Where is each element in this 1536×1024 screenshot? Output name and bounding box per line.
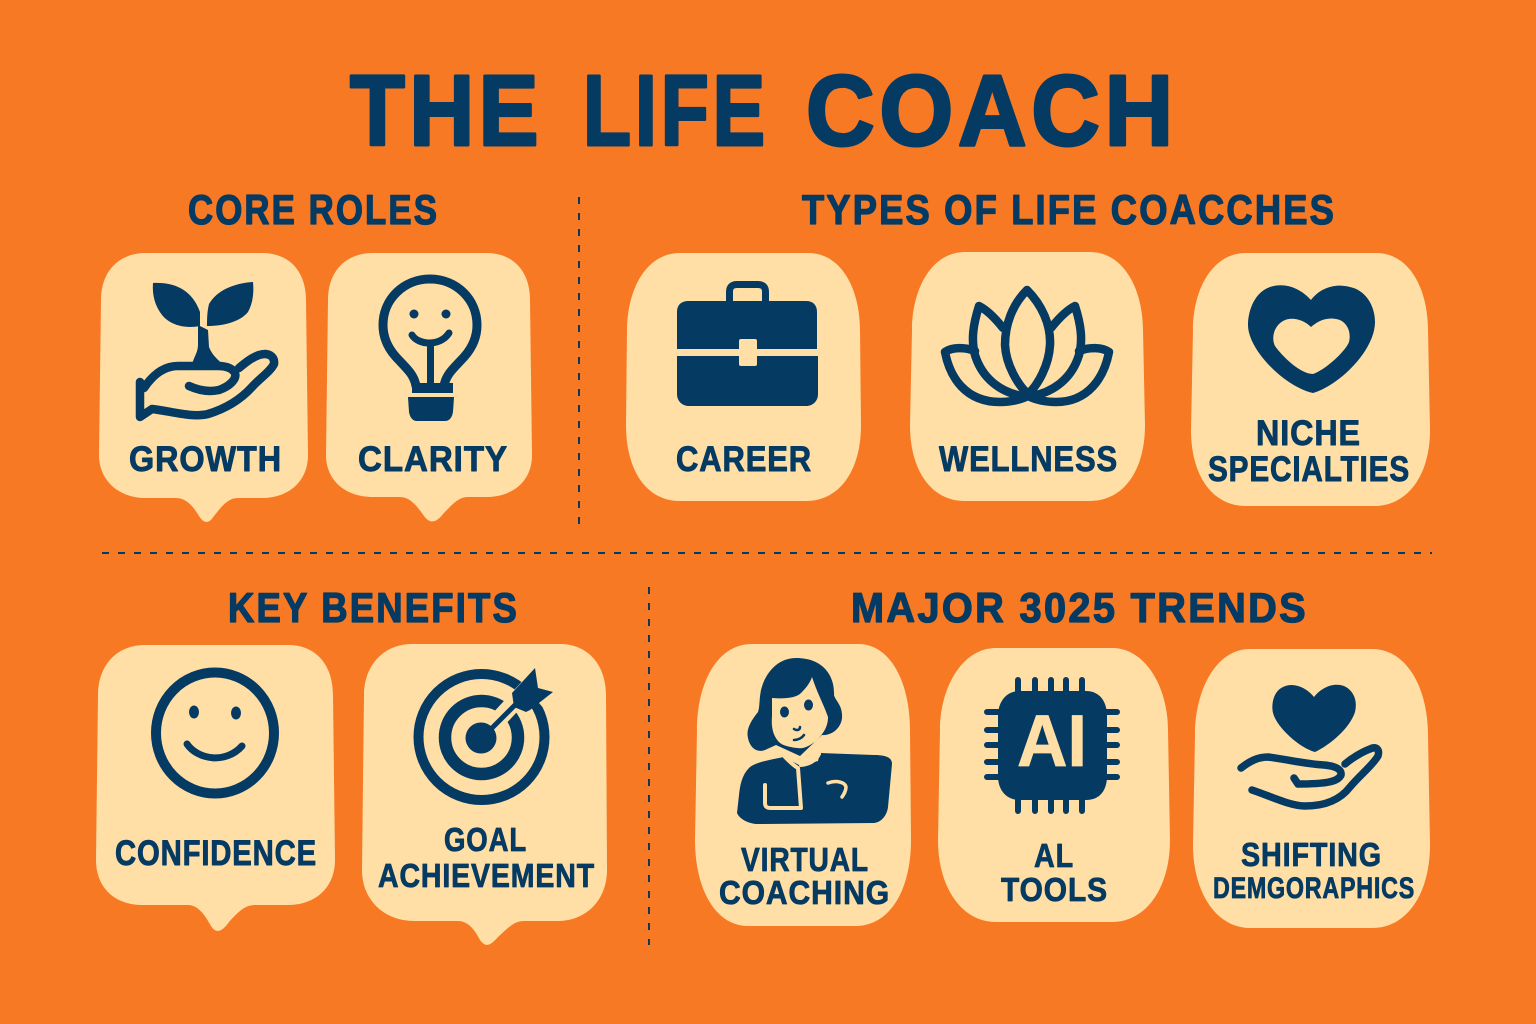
title: LIFE <box>583 55 769 167</box>
heading: types of life coaches: TYPES OF LIFE COACCHES <box>802 186 1336 233</box>
icon: smiling light bulb <box>383 279 477 421</box>
panel: major trends <box>695 584 1430 928</box>
card: confidence <box>96 645 335 931</box>
card: goal achievement <box>362 644 607 945</box>
card: growth <box>99 253 308 522</box>
label: wellness: WELLNESS <box>939 440 1118 479</box>
label: achievement: ACHIEVEMENT <box>378 857 595 894</box>
label: demographics: DEMGORAPHICS <box>1213 872 1415 905</box>
card: virtual coaching <box>695 644 911 926</box>
icon: target with arrow <box>418 668 553 800</box>
icon: ai chip <box>987 680 1117 811</box>
heading: key benefits: KEY BENEFITS <box>228 584 519 631</box>
panel: core roles <box>99 186 532 522</box>
card: wellness <box>910 252 1145 501</box>
title: THE <box>350 55 543 167</box>
label: niche: NICHE <box>1256 414 1361 453</box>
label: shifting: SHIFTING <box>1241 836 1382 873</box>
icon: briefcase <box>677 284 818 406</box>
panel: key benefits <box>96 584 607 945</box>
icon: coach at laptop <box>737 658 892 824</box>
card: clarity <box>326 253 532 521</box>
panel: types of life coaches <box>626 186 1430 506</box>
label: career: CAREER <box>676 440 812 479</box>
heading: major trends: MAJOR 3025 TRENDS <box>851 584 1308 631</box>
label: virtual: VIRTUAL <box>741 841 869 878</box>
card: career <box>626 253 861 501</box>
label: tools: TOOLS <box>1001 871 1108 908</box>
label: specialties: SPECIALTIES <box>1208 450 1410 489</box>
label: al: AL <box>1034 837 1074 874</box>
icon: heart over open hand <box>1241 685 1379 806</box>
icon: lotus <box>945 290 1109 402</box>
card: ai tools <box>938 648 1170 922</box>
icon: double heart <box>1248 285 1375 393</box>
label: coaching: COACHING <box>719 874 890 911</box>
chip letters: AI <box>1017 701 1087 782</box>
title: COACH <box>806 55 1178 167</box>
icon: smiley face <box>156 672 274 794</box>
title <box>350 55 1178 167</box>
label: growth: GROWTH <box>129 440 282 479</box>
label: confidence: CONFIDENCE <box>115 834 317 873</box>
label: clarity: CLARITY <box>358 440 508 479</box>
icon: seedling in hand <box>140 282 274 417</box>
card: shifting demographics <box>1193 649 1430 928</box>
card: niche specialties <box>1191 253 1430 506</box>
heading: core roles: CORE ROLES <box>188 186 439 233</box>
label: goal: GOAL <box>444 821 527 858</box>
